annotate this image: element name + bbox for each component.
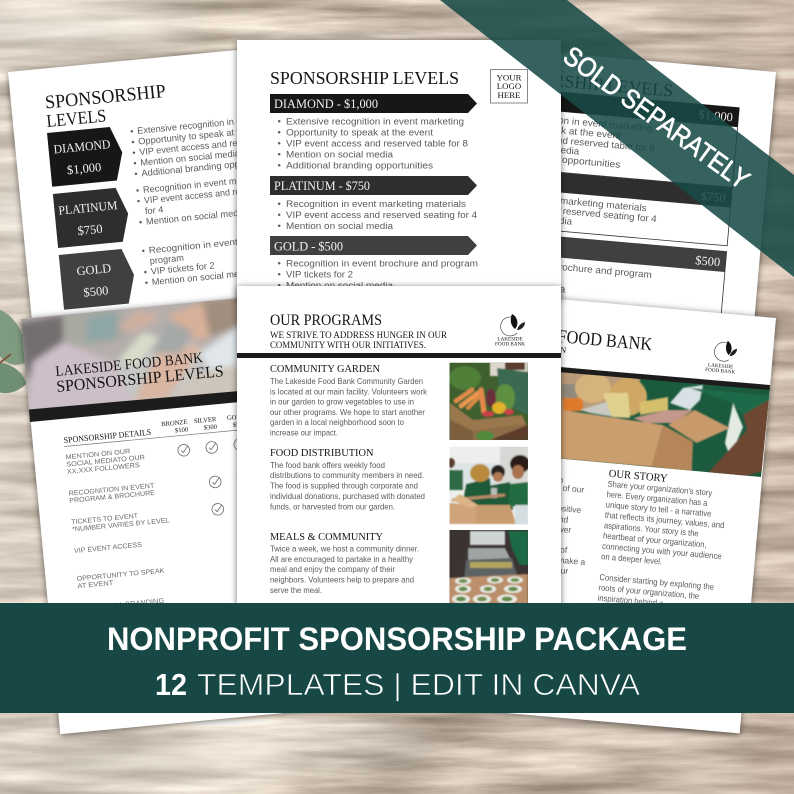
bullet list: platinum benefits: VIP event access and reserved seating for 4: [286, 210, 478, 221]
tier tag: diamond: [47, 126, 125, 187]
panel: center our programs page: [237, 286, 561, 636]
banner headline: NONPROFIT SPONSORSHIP PACKAGE: [107, 621, 687, 657]
bullet list: diamond benefits: Additional branding opportunities: [286, 160, 433, 172]
eucalyptus leaves: [0, 308, 26, 393]
section: community garden: The Lakeside Food Bank Community Garden: [270, 376, 423, 386]
bullet list: gold benefits: program: [149, 253, 185, 266]
bullet list: gold benefits: •: [278, 270, 281, 280]
section: community garden: our other programs. We hope to start another: [270, 407, 425, 417]
logo placeholder: LOGO: [497, 81, 521, 91]
text block: our story: OUR STORY: [608, 468, 668, 485]
section: meals and community: Twice a week, we host a community dinner.: [270, 544, 419, 554]
logo placeholder: [490, 70, 528, 103]
tier box: diamond: Opportunity to speak at the event: [474, 118, 622, 142]
bullet list: diamond benefits: •: [132, 148, 136, 158]
text block: our story: aspirations. Your story is the: [604, 520, 699, 538]
table rows: [65, 445, 178, 613]
panel: left sponsorship table page: [15, 291, 359, 734]
section: meals and community: MEALS & COMMUNITY: [270, 531, 383, 543]
tier box: gold: Mention on social media: [458, 275, 566, 296]
section: food distribution: individual donations, purchased with donated: [270, 491, 425, 501]
bullet list: diamond benefits: Extensive recognition in event marketing: [286, 116, 464, 128]
tier box: diamond: VIP event access and reserved table for 8: [473, 128, 655, 155]
section: community garden: in our garden to grow vegetables to use in: [270, 396, 414, 406]
tier tag: gold: [59, 248, 137, 310]
table rows: ADDITIONAL BRANDING: [79, 598, 165, 613]
tier tag: diamond: $1,000: [66, 160, 102, 177]
bullet list: diamond benefits: •: [131, 137, 135, 147]
tier box: platinum: Mention on social media: [465, 207, 573, 228]
text fragments: left column of story page: n: [558, 475, 564, 485]
bullet list: gold benefits: •: [278, 258, 281, 270]
bullet list: platinum benefits: •: [278, 210, 281, 221]
bullet list: gold benefits: •: [143, 267, 147, 277]
text block: our story: connecting you with your audience: [602, 541, 722, 561]
check marks: [177, 438, 252, 518]
table rows: AT EVENT: [77, 580, 114, 590]
heading: our programs: OUR PROGRAMS: [270, 312, 382, 329]
banner: nonprofit sponsorship package: [0, 603, 794, 713]
table rows: RECOGNITION IN EVENT: [68, 483, 155, 498]
text block: our story: unique story to tell - a narrative: [605, 499, 712, 519]
section: meals and community: All are encouraged to partake in a healthy: [270, 554, 414, 564]
bullet list: platinum benefits: Recognition in event marketing materials: [142, 169, 310, 195]
section: community garden: is located at our main facility. Volunteers work: [270, 386, 428, 396]
bullet list: platinum benefits: •: [278, 221, 281, 232]
heading: our programs: COMMUNITY WITH OUR INITIATIVES.: [270, 341, 426, 351]
bullet list: diamond benefits: •: [278, 128, 281, 138]
tier tag: platinum: [53, 187, 131, 248]
photo: donation box with food: [561, 367, 770, 477]
logo: lakeside food bank: [705, 339, 738, 376]
heading: sponsorship levels: SPONSORSHIP LEVELS: [484, 64, 674, 101]
section: food distribution: The food bank offers weekly food: [270, 460, 385, 470]
table column headers: GOLD: [227, 413, 246, 422]
tier tag: gold: GOLD: [76, 261, 112, 278]
black band: [237, 353, 561, 358]
bullet list: gold benefits: Mention on social media: [151, 268, 253, 287]
bullet list: platinum benefits: VIP event access and reserved seating: [143, 181, 299, 206]
section: food distribution: [270, 447, 425, 512]
table column headers: $300: [204, 423, 218, 432]
logo: lakeside food bank: FOOD BANK: [705, 367, 736, 376]
table column headers: [63, 409, 292, 447]
tier box: diamond: Additional branding opportunities: [471, 147, 621, 171]
bullet list: platinum benefits: Mention on social media: [146, 207, 247, 227]
bullet list: gold benefits: •: [278, 280, 281, 292]
banner: sold separately: SOLD SEPARATELY: [558, 40, 755, 195]
tier box: gold: VIP tickets for 2: [459, 264, 527, 281]
tier bar: platinum: [270, 176, 477, 195]
text fragments: left column of story page: of our: [562, 483, 585, 495]
bullet list: gold benefits: [278, 258, 478, 292]
bullet list: diamond benefits: Additional branding opportunities: [141, 155, 279, 178]
bullet list: diamond benefits: Mention on social media: [286, 150, 394, 160]
section: community garden: [270, 363, 428, 438]
banner subheadline: TEMPLATES | EDIT IN CANVA: [197, 667, 640, 702]
heading: sponsorship levels: SPONSORSHIP: [44, 81, 167, 114]
banner: sold separately: [440, 0, 794, 277]
table column headers: $500: [232, 421, 247, 429]
heading: sponsorship levels: LEVELS: [45, 105, 107, 131]
bullet list: platinum benefits: [278, 199, 478, 232]
bullet list: platinum benefits: •: [137, 196, 141, 206]
tier box: diamond: Extensive recognition in event marketing: [475, 108, 653, 134]
panel: right back sponsorship levels page: [451, 46, 776, 371]
section: meals and community: meal and enjoy the company of their: [270, 564, 395, 574]
heading: our programs: WE STRIVE TO ADDRESS HUNGER IN OUR: [270, 331, 448, 341]
table rows: TICKETS TO EVENT: [71, 513, 138, 526]
tier box: gold: $500: [695, 253, 721, 269]
bullet list: diamond benefits: VIP event access and reserved table for 8: [139, 131, 308, 157]
text block: our story: roots of your organization, the: [598, 582, 700, 601]
tier tag: platinum: PLATINUM: [58, 198, 118, 218]
bullet list: gold benefits: Recognition in event brochure and program: [286, 258, 478, 270]
banner subheadline: 12: [155, 667, 187, 702]
heading: sponsorship levels: SPONSORSHIP LEVELS: [270, 68, 459, 88]
section: food distribution: funds, or harvested from our garden.: [270, 502, 395, 512]
heading: sponsorship levels: [44, 81, 168, 131]
tier box: platinum: [462, 165, 732, 246]
table rows: PROGRAM & BROCHURE: [69, 490, 156, 505]
tier bar: platinum: PLATINUM - $750: [274, 179, 370, 193]
bullet list: diamond benefits: Opportunity to speak at the event: [286, 128, 433, 138]
bullet list: diamond benefits: VIP event access and reserved table for 8: [286, 138, 468, 150]
black band above photo: [540, 366, 770, 390]
bullet list: gold benefits: •: [144, 278, 149, 288]
bullet list: diamond benefits: Mention on social media: [140, 148, 241, 168]
bullet list: diamond benefits: •: [278, 116, 281, 128]
text block: our story: Consider starting by exploring the: [599, 572, 715, 592]
text fragments: left column of story page: make a: [557, 555, 586, 567]
section: meals and community: neighbors. Volunteers help to prepare and: [270, 574, 414, 584]
logo: lakeside food bank: LAKESIDE: [708, 362, 733, 370]
text fragments: left column of story page: [556, 344, 586, 576]
table column headers: SILVER: [194, 416, 217, 425]
bullet list: diamond benefits: •: [130, 126, 134, 137]
tier tag: gold: $500: [83, 283, 109, 300]
tier box: gold: [452, 228, 727, 361]
heading: lakeside food bank sponsorship levels: LAKESIDE FOOD BANK: [55, 350, 204, 380]
logo placeholder: YOUR: [497, 72, 522, 82]
table rows: VIP EVENT ACCESS: [74, 542, 143, 555]
tier tag: diamond: DIAMOND: [53, 137, 111, 156]
bullet list: platinum benefits: •: [139, 217, 143, 227]
bullet list: gold benefits: VIP tickets for 2: [286, 270, 353, 280]
bullet list: gold benefits: Recognition in event brochure and: [148, 231, 299, 255]
table rows: *NUMBER VARIES BY LEVEL: [72, 517, 170, 534]
panel: right our story page: [441, 292, 776, 733]
text fragments: left column of story page: nd: [558, 514, 569, 525]
bullet list: diamond benefits: •: [278, 150, 281, 160]
heading: lakeside food bank: LAKESIDE FOOD BANK: [473, 320, 654, 355]
bullet list: platinum benefits: for 4: [144, 204, 164, 216]
panel: left back sponsorship levels page: [8, 44, 327, 371]
photo: vegetable crate: [449, 362, 529, 441]
tier box: platinum: Recognition in event marketing materials: [467, 188, 647, 214]
bullet list: diamond benefits: •: [278, 138, 281, 150]
text fragments: left column of story page: wer: [556, 524, 572, 535]
logo: lakeside food bank: [495, 314, 525, 348]
text block: our story: that reflects its journey, values, and: [604, 510, 725, 530]
section: food distribution: FOOD DISTRIBUTION: [270, 447, 374, 459]
section: community garden: garden in a local neighborhood soon to: [270, 417, 404, 427]
tier box: platinum: VIP event access and reserved seating for 4: [466, 198, 657, 225]
tier bar: gold: [270, 236, 477, 255]
logo: lakeside food bank: FOOD BANK: [495, 342, 525, 348]
tier box: diamond: Mention on social media: [472, 137, 580, 158]
bullet list: diamond benefits: Opportunity to speak at the event: [138, 123, 276, 147]
text block: our story: [597, 468, 729, 613]
table column headers: SPONSORSHIP DETAILS: [63, 427, 152, 445]
table rows: OPPORTUNITY TO SPEAK: [76, 568, 165, 583]
tier box: platinum: $750: [700, 189, 726, 205]
bullet list: gold benefits: •: [141, 246, 145, 256]
table column headers: BRONZE: [161, 419, 188, 428]
bullet list: diamond benefits: Extensive recognition in event marketing: [137, 110, 302, 136]
section: meals and community: [270, 531, 419, 595]
photo: meal service: [449, 530, 529, 605]
section: community garden: increase our impact.: [270, 428, 338, 438]
section: food distribution: The food is supplied through corporate and: [270, 480, 418, 490]
heading: our programs: [270, 312, 448, 351]
tier box: gold: Recognition in event brochure and program: [460, 253, 652, 281]
bullet list: gold benefits: [141, 231, 302, 288]
table rows: XX,XXX FOLLOWERS: [67, 462, 141, 476]
photo: volunteers packing boxes: [447, 446, 530, 525]
bullet list: platinum benefits: [135, 169, 313, 227]
tier bar: gold: GOLD - $500: [274, 240, 343, 254]
table rows: MENTION ON OUR: [65, 448, 131, 461]
heading: lakeside food bank sponsorship levels: SPONSORSHIP LEVELS: [55, 361, 224, 396]
text block: our story: Share your organization's story: [607, 479, 713, 498]
text block: our story: on a deeper level.: [601, 551, 662, 566]
text fragments: left column of story page: ositive: [557, 503, 582, 515]
text block: our story: heartbeat of your organization,: [603, 530, 707, 550]
bullet list: diamond benefits: [278, 116, 468, 172]
text fragments: left column of story page: N: [560, 344, 567, 355]
text block: our story: here. Every organization has a: [606, 489, 708, 508]
tier box: diamond: $1,000: [698, 107, 733, 124]
bullet list: platinum benefits: •: [278, 199, 281, 210]
bullet list: gold benefits: Mention on social media: [286, 280, 394, 292]
section: food distribution: distributions to community members in need.: [270, 470, 424, 480]
section: community garden: COMMUNITY GARDEN: [270, 363, 380, 375]
table column headers: $100: [175, 426, 189, 434]
bullet list: diamond benefits: •: [134, 169, 138, 179]
logo placeholder: HERE: [498, 90, 520, 100]
bullet list: platinum benefits: Recognition in event marketing materials: [286, 199, 466, 210]
tier bar: diamond: DIAMOND - $1,000: [274, 97, 378, 111]
text fragments: left column of story page: of: [560, 544, 568, 555]
bullet list: platinum benefits: •: [135, 185, 140, 196]
bullet list: diamond benefits: [130, 110, 310, 179]
bullet list: diamond benefits: •: [278, 160, 281, 172]
logo: lakeside food bank: LAKESIDE: [497, 336, 523, 342]
tier bar: diamond: [270, 94, 477, 113]
bullet list: gold benefits: VIP tickets for 2: [150, 260, 215, 277]
panel: center sponsorship levels page: [237, 40, 561, 300]
bullet list: diamond benefits: •: [133, 158, 137, 168]
tier tag: platinum: $750: [77, 222, 103, 238]
black band under photo: [29, 390, 245, 422]
tier box: diamond: [467, 85, 739, 187]
photo: hands passing canned food: [21, 298, 237, 410]
text fragments: left column of story page: ur: [560, 565, 569, 576]
text block: our story: inspiration behind a: [597, 593, 664, 608]
table rows: SOCIAL MEDIATO OUR: [66, 454, 145, 469]
section: meals and community: serve the meal.: [270, 585, 322, 595]
bullet list: platinum benefits: Mention on social media: [286, 221, 394, 232]
